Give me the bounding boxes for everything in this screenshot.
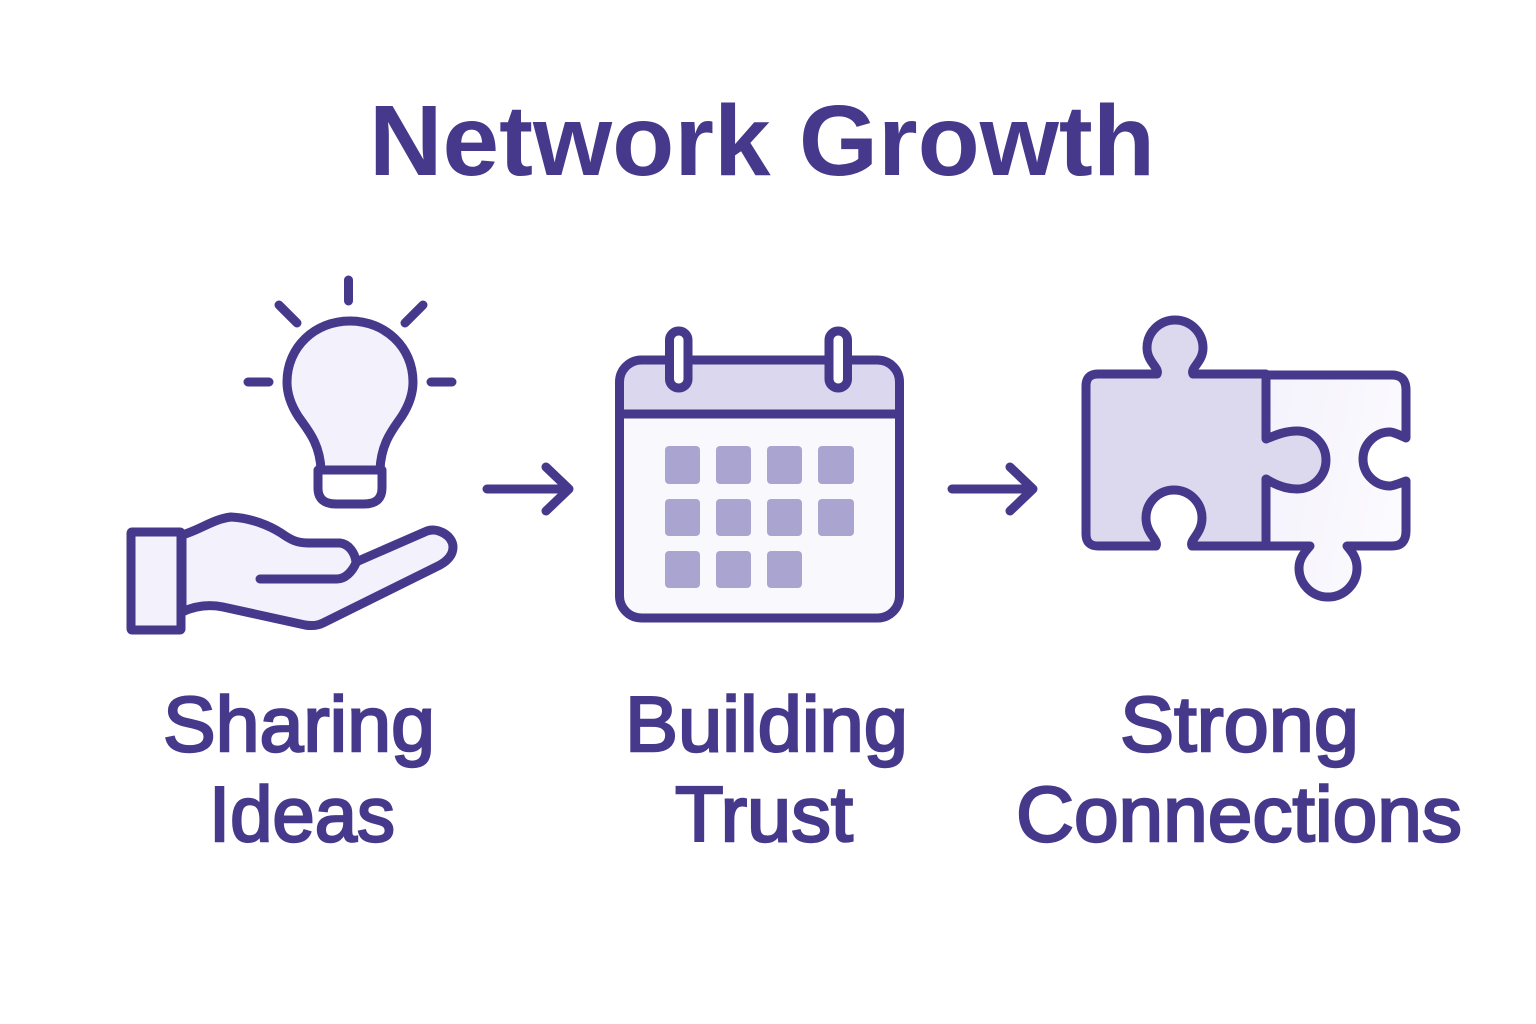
label: sharing ideas: Sharing xyxy=(163,680,435,768)
title: Network Growth xyxy=(369,85,1155,197)
icon: open hand xyxy=(131,517,453,630)
step 1: sharing ideas xyxy=(131,280,453,858)
label: strong connections: Strong xyxy=(1120,680,1359,768)
label: building trust: Building xyxy=(625,680,908,768)
label: building trust xyxy=(625,680,908,858)
step 3: strong connections xyxy=(1016,320,1462,858)
puzzle piece: left xyxy=(1086,320,1326,546)
icon: light bulb xyxy=(248,280,452,504)
icon: calendar xyxy=(620,331,900,618)
puzzle piece: right xyxy=(1266,375,1406,597)
label: sharing ideas xyxy=(163,680,435,858)
arrow: trust to connections xyxy=(952,467,1033,511)
label: building trust: Trust xyxy=(675,770,853,858)
icon: puzzle pieces xyxy=(1086,320,1406,597)
arrow: sharing to trust xyxy=(487,467,569,511)
step 2: building trust xyxy=(620,331,908,858)
label: strong connections: Connections xyxy=(1016,770,1462,858)
label: sharing ideas: Ideas xyxy=(209,770,395,858)
label: strong connections xyxy=(1016,680,1462,858)
calendar day squares xyxy=(665,446,854,588)
